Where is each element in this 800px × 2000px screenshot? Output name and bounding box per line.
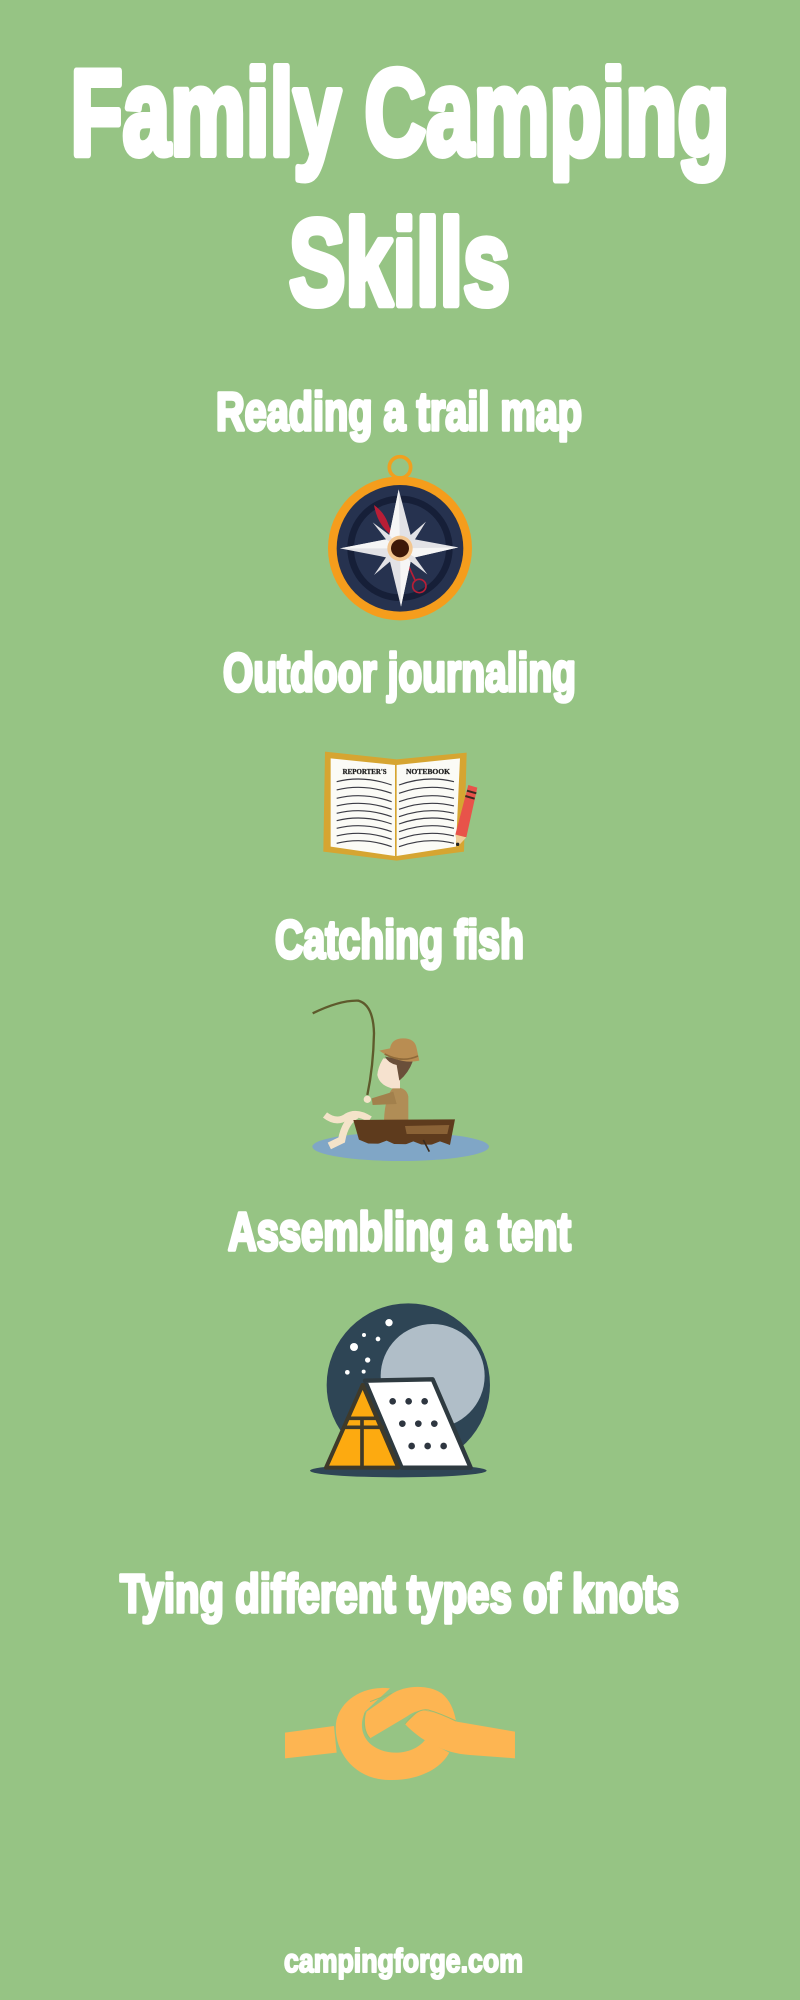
- heading: outdoor journaling: Outdoor journaling: [223, 643, 576, 703]
- icon: notebook: REPORTER'S: [343, 768, 387, 776]
- icon: tent under the moon: [310, 1303, 490, 1477]
- footer: website: campingforge.com: [284, 1942, 523, 1979]
- title: Skills: [289, 194, 510, 330]
- title: [70, 44, 730, 330]
- heading: catching fish: Catching fish: [275, 910, 524, 970]
- icon: compass: [328, 457, 472, 620]
- heading: assembling a tent: Assembling a tent: [228, 1202, 571, 1262]
- icon: notebook: [323, 752, 477, 861]
- icon: notebook: NOTEBOOK: [406, 768, 451, 776]
- heading: reading a trail map: Reading a trail map: [216, 382, 582, 442]
- icon: person fishing in a boat: [312, 1001, 489, 1161]
- icon: knot: [285, 1687, 515, 1780]
